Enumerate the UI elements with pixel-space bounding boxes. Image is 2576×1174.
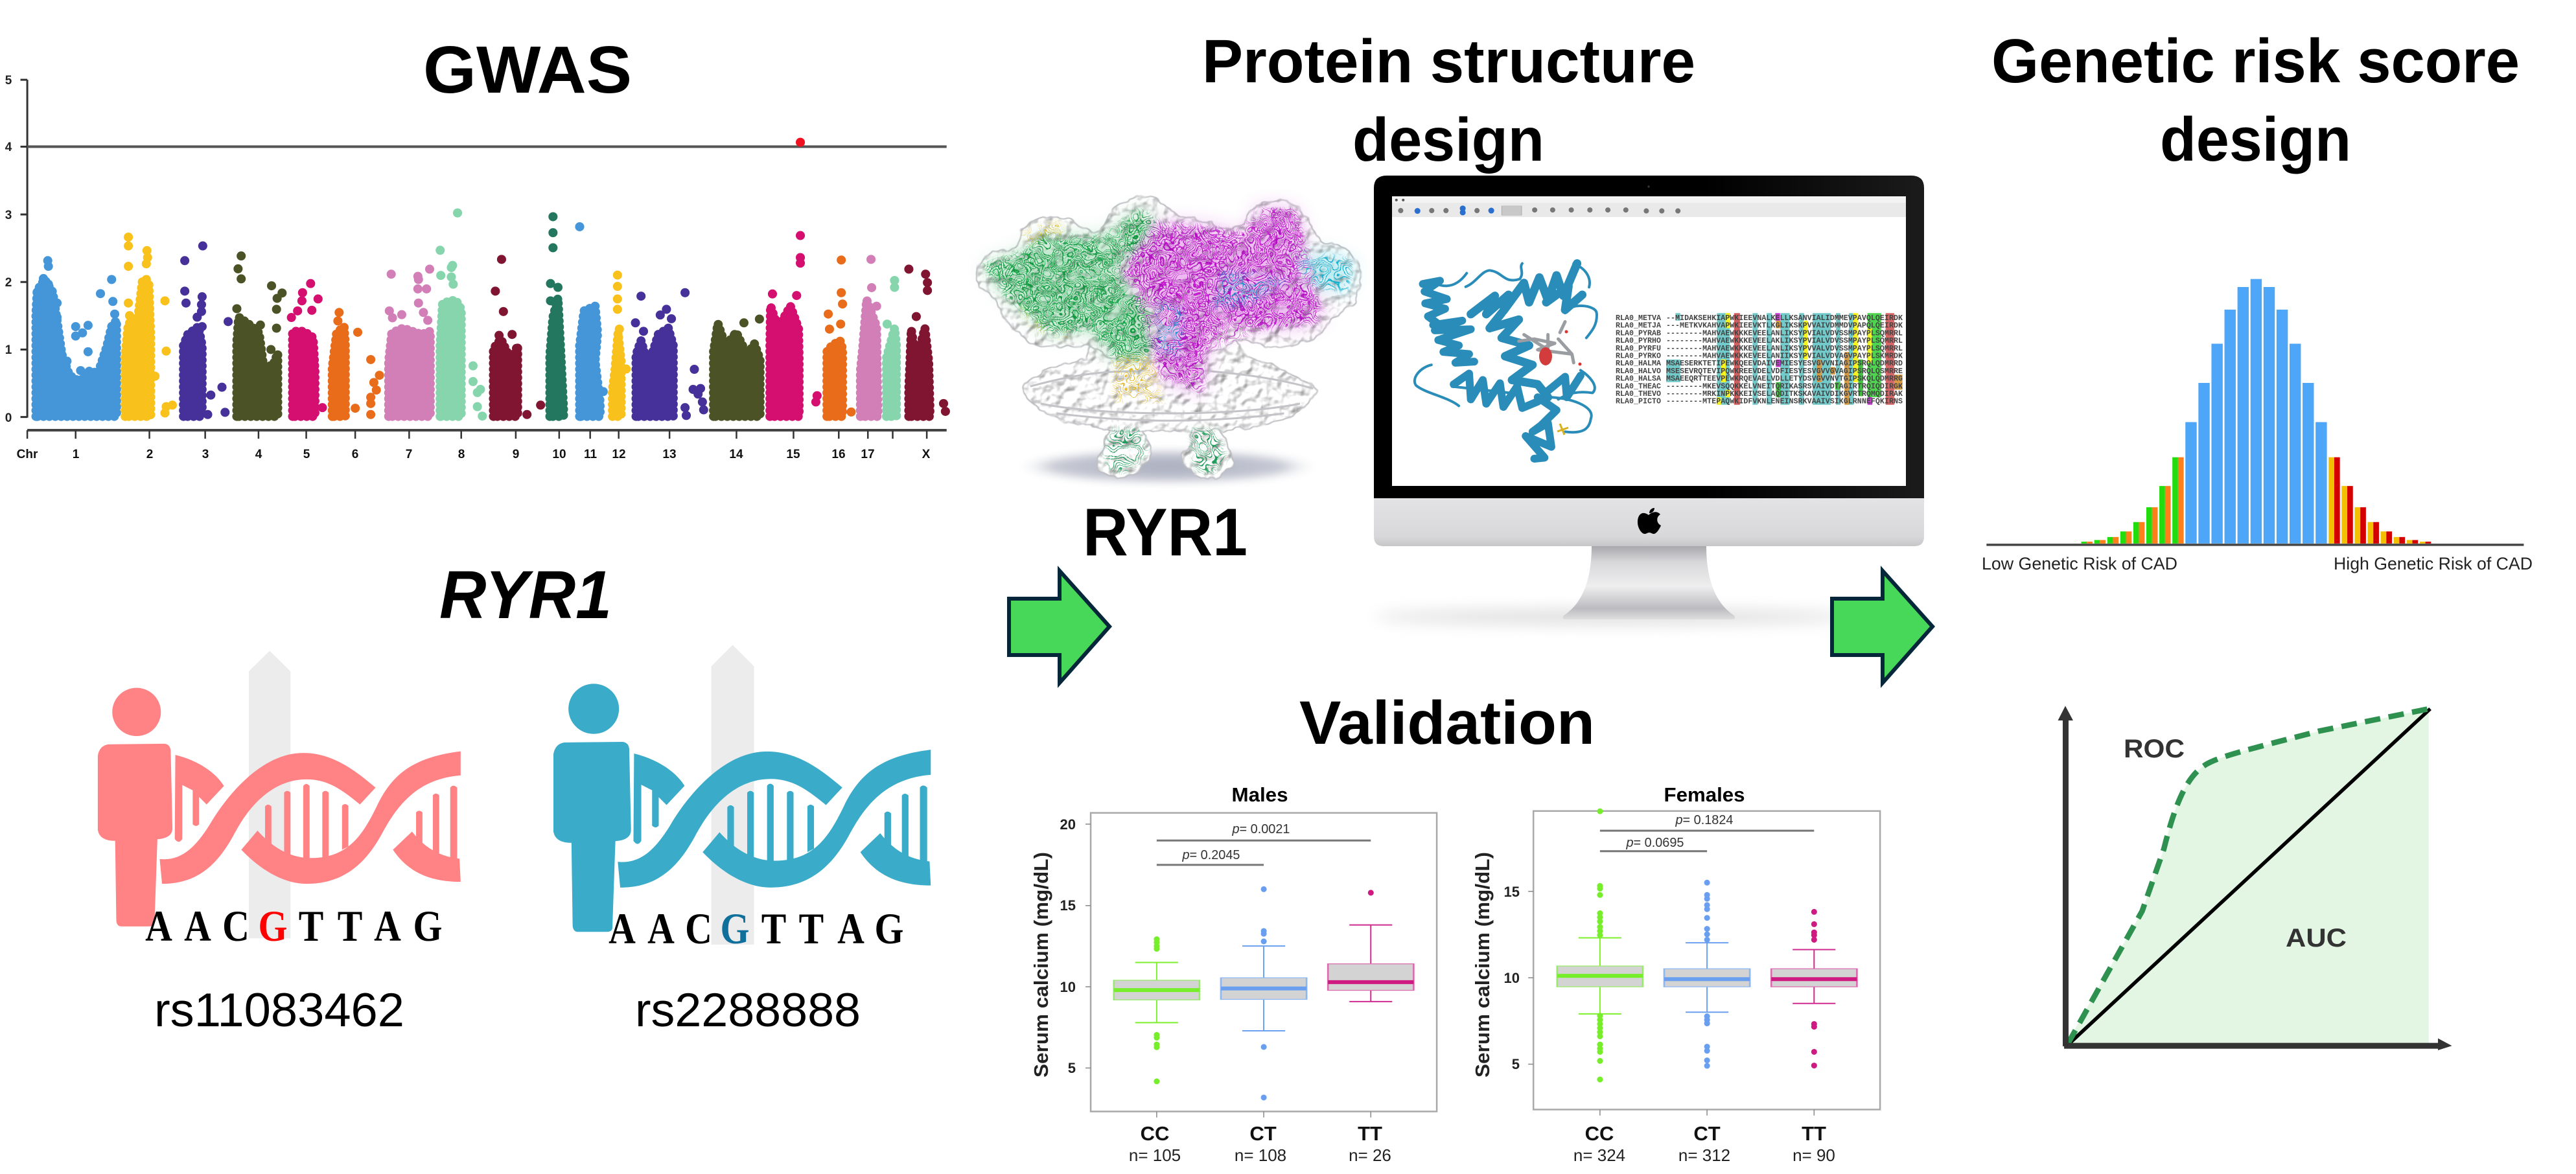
CC box: [1114, 939, 1200, 1081]
base sequence: A: [647, 904, 675, 953]
y tick labels: 15: [1504, 884, 1520, 900]
genotype labels: TT: [1358, 1122, 1382, 1145]
genotype labels: CT: [1693, 1122, 1721, 1145]
p values: p= 0.2045: [1182, 848, 1240, 862]
alignment rows: --------MRKINPKKKEIVSELAQDITKSKAVAIVDIKGVRTRQMQDIRAK: [1666, 389, 1903, 398]
ROC curve chart: [2058, 706, 2452, 1050]
computer monitor: [1374, 176, 1924, 624]
genotype labels: [1573, 1122, 1835, 1165]
low-risk green tails: [2082, 457, 2178, 544]
y tick labels: 10: [1060, 979, 1076, 995]
alignment rows: RLA0_PYRFU: [1616, 344, 1661, 353]
high-risk yellow tails: [2328, 457, 2426, 544]
alignment rows: MSESEVRQTEVIPQWKREEVDELVDFIESYESVGVVGVAGIPSRQLQSMRRE: [1666, 367, 1903, 376]
genotype labels: n= 90: [1793, 1145, 1835, 1165]
manhattan chromosome labels: 2: [146, 448, 153, 461]
arrow: centre to right: [1832, 571, 1932, 683]
manhattan y axis labels: 4: [5, 141, 12, 154]
manhattan y axis labels: 0: [5, 411, 12, 425]
ligand atoms: [1564, 330, 1581, 365]
protein chains: [982, 207, 1353, 475]
alignment rows: [1616, 314, 1903, 406]
axis arrowheads: [2058, 706, 2452, 1050]
genotype labels: CC: [1141, 1122, 1169, 1145]
alignment rows: --------MAHVAEWKKKEVEELAKLIKSYPVIALVDVSSMPAYPLSQMRRL: [1666, 336, 1903, 345]
genotype labels: [1129, 1122, 1391, 1165]
manhattan chromosome labels: Chr: [17, 448, 38, 461]
y axis title: Serum calcium (mg/dL): [1471, 852, 1494, 1077]
high-risk red tails: [2334, 457, 2431, 544]
title: GWAS: GWAS: [423, 32, 632, 107]
base sequence: A: [837, 904, 864, 953]
title: genetic risk score design: Genetic risk score: [1991, 27, 2520, 96]
base sequence: A: [145, 902, 172, 950]
y axis title: Serum calcium (mg/dL): [1030, 852, 1052, 1077]
alignment rows: ---METKVKAHVAPWKIEEVKTLKGLIKSKPVVAIVDMMDVPAPQLQEIRDK: [1666, 321, 1903, 330]
alignment rows: RLA0_HALMA: [1616, 359, 1662, 368]
boxes and whiskers: [1528, 811, 1880, 1116]
area under curve: [2066, 709, 2429, 1044]
app toolbar: [1392, 196, 1906, 217]
manhattan y axis labels: 1: [5, 343, 12, 357]
diagonal: [2066, 709, 2430, 1046]
panel title: Females: [1664, 783, 1745, 806]
gray marker arrow: [249, 651, 290, 938]
heme ligand: [1519, 322, 1573, 363]
sequence alignment: [1616, 313, 1903, 406]
channel disc surface: [1015, 339, 1323, 432]
disc seams: [1030, 371, 1313, 420]
SNP id: rs11083462: [154, 984, 404, 1037]
manhattan chromosome labels: 12: [612, 448, 626, 461]
alignment rows: RLA0_THEAC: [1616, 382, 1661, 391]
alignment rows: --------MAHVAEWKKKEVEELANLIKSYPVIALVDVSSMPAYPLSQMRRL: [1666, 328, 1903, 338]
y tick labels: [1504, 884, 1520, 1072]
axes: [2064, 717, 2441, 1046]
base sequence: T: [338, 902, 362, 950]
conservation highlights: [1666, 313, 1903, 405]
SNP figure: rs11083462: [98, 651, 461, 1037]
SNP figure: rs2288888: [553, 645, 931, 1037]
manhattan chromosome labels: 14: [729, 448, 743, 461]
manhattan y axis labels: [5, 74, 12, 425]
manhattan chromosome labels: 16: [831, 448, 846, 461]
AUC label: AUC: [2286, 924, 2347, 952]
base sequence: G: [413, 902, 443, 950]
manhattan axes and threshold line: [21, 80, 947, 439]
toolbar buttons: [1397, 200, 1678, 215]
title: genetic risk score design: [1991, 27, 2520, 174]
title: RYR1 gene: RYR1: [439, 557, 612, 633]
manhattan chromosome labels: 1: [73, 448, 80, 461]
alignment rows: RLA0_HALVO: [1616, 367, 1661, 376]
base sequence: C: [222, 902, 249, 950]
manhattan chromosome labels: 9: [513, 448, 519, 461]
alignment rows: RLA0_METVA: [1616, 314, 1662, 323]
base sequence: G: [721, 904, 749, 953]
alignment rows: --MIDAKSEHKIAPWKIEEVNALKELLKSANVIALIDMMEVPAVQLQEIRDK: [1666, 314, 1903, 323]
genotype labels: CT: [1249, 1122, 1277, 1145]
manhattan chromosome labels: 7: [406, 448, 412, 461]
alignment rows: RLA0_PYRKO: [1616, 351, 1661, 360]
boxplot: Males: [1030, 783, 1437, 1165]
TT box: [1328, 893, 1413, 1002]
manhattan y axis labels: 2: [5, 276, 12, 290]
alignment rows: --------MAHVAEWKKKEVEELANIIKSYPVIALVDVAGVPAYPLSKMRDK: [1666, 351, 1903, 360]
alignment rows: RLA0_PYRAB: [1616, 328, 1661, 338]
alignment rows: MSAEEQRTTEEVPEWKRQEVAELVDLLETYDSVGVVNVTGIPSKQLQDMRRG: [1666, 374, 1903, 384]
central blue bars: [2185, 279, 2327, 544]
protein ribbon model: [1415, 264, 1597, 459]
manhattan plot: [5, 74, 947, 461]
RYR1 protein structure: [973, 194, 1362, 485]
color tint layer: [982, 207, 1353, 393]
screen: [1392, 196, 1906, 486]
genotype labels: TT: [1802, 1122, 1826, 1145]
p values: p= 0.0021: [1232, 822, 1290, 836]
genotype labels: n= 108: [1235, 1145, 1286, 1165]
y tick labels: 15: [1060, 897, 1076, 914]
label: RYR1: RYR1: [1083, 495, 1247, 570]
manhattan y axis labels: 5: [5, 74, 12, 87]
alignment rows: RLA0_PYRHO: [1616, 336, 1661, 345]
manhattan chromosome labels: X: [922, 448, 931, 461]
monitor shadow: [1374, 610, 1853, 624]
significant SNP: [796, 138, 805, 147]
histogram baseline: [1986, 544, 2524, 546]
manhattan data points: [36, 143, 946, 417]
alignment rows: RLA0_PICTO: [1616, 397, 1661, 406]
ROC curve dashed: [2068, 709, 2429, 1044]
y tick labels: 5: [1068, 1060, 1076, 1076]
title: protein structure design: [1202, 27, 1695, 174]
genotype labels: n= 26: [1349, 1145, 1391, 1165]
alignment rows: --------MTEPAQWKIDFVKNLENEINSRKVAAIVSIKGLRNNEFQKIRNS: [1666, 397, 1903, 406]
feet surface: [1093, 425, 1238, 479]
camera dot: [1647, 185, 1650, 188]
genotype labels: CC: [1585, 1122, 1614, 1145]
low risk label: Low Genetic Risk of CAD: [1982, 554, 2177, 573]
manhattan chromosome labels: 10: [552, 448, 566, 461]
manhattan chromosome labels: 5: [303, 448, 310, 461]
genotype labels: n= 324: [1573, 1145, 1625, 1165]
manhattan chromosome labels: 3: [202, 448, 209, 461]
title: protein structure design: design: [1352, 106, 1544, 174]
arrow: left to centre: [1009, 571, 1109, 683]
genotype labels: n= 105: [1129, 1145, 1181, 1165]
chart geometry: [2058, 706, 2452, 1050]
y tick labels: 10: [1504, 970, 1520, 986]
base sequence: T: [299, 902, 323, 950]
TT box: [1771, 912, 1857, 1066]
histogram bars: [1986, 279, 2524, 545]
monitor stand: [1563, 546, 1735, 619]
heme iron: [1539, 347, 1552, 365]
manhattan chromosome labels: 6: [352, 448, 358, 461]
secondary protein chains: [982, 207, 1321, 404]
high risk label: High Genetic Risk of CAD: [2334, 554, 2533, 573]
low-risk orange tails: [2087, 457, 2184, 544]
alignment rows: --------MKEVSQQKKELVNEITQRIKASRSVAIVDTAGIRTRQIQDIRGK: [1666, 382, 1903, 391]
alignment rows: --------MAHVAEWKKKEVEELANLIKSYPVVALVDVSSMPAYPLSQMRRL: [1666, 344, 1903, 353]
manhattan y axis labels: 3: [5, 209, 12, 222]
title: Validation: Validation: [1299, 689, 1595, 757]
p values: p= 0.1824: [1675, 813, 1733, 827]
ground shadow: [1014, 448, 1322, 485]
base sequence: A: [184, 902, 211, 950]
SNP id: rs2288888: [635, 984, 861, 1037]
base sequence: T: [761, 904, 786, 953]
apple logo icon: [1638, 508, 1661, 534]
base sequence: G: [259, 902, 287, 950]
panel title: Males: [1231, 783, 1288, 806]
manhattan chromosome labels: 17: [861, 448, 875, 461]
alignment rows: RLA0_THEVO: [1616, 389, 1661, 398]
sulfate group: [1557, 424, 1568, 435]
person and DNA helix, blue: [553, 684, 931, 932]
CT box: [1664, 882, 1750, 1066]
monitor bezel: [1374, 176, 1924, 498]
y tick labels: 5: [1512, 1056, 1520, 1072]
manhattan chromosome labels: 11: [584, 448, 597, 461]
manhattan chromosome labels: 15: [786, 448, 800, 461]
genotype labels: n= 312: [1678, 1145, 1730, 1165]
person and DNA helix, pink: [98, 688, 461, 927]
CC box: [1557, 811, 1643, 1079]
base sequence: A: [374, 902, 401, 950]
cytoplasmic surface: [973, 194, 1362, 363]
p values: [1182, 822, 1290, 862]
base sequence: C: [685, 904, 712, 953]
CT box: [1221, 889, 1306, 1098]
boxplot: Females: [1471, 783, 1880, 1165]
manhattan chromosome labels: 4: [255, 448, 262, 461]
base sequence: A: [609, 904, 636, 953]
y tick labels: 20: [1060, 816, 1076, 833]
alignment rows: MSAESERKTETIPEWKQEEVDAIVEMIESYESVGVVNIAGIPSRQLQDMRRD: [1666, 359, 1903, 368]
ribbon helices: [1423, 281, 1474, 363]
ribbon loops: [1415, 264, 1597, 432]
base sequence: T: [799, 904, 824, 953]
manhattan chromosome labels: 13: [662, 448, 677, 461]
manhattan chromosome labels: 8: [458, 448, 465, 461]
base sequence: G: [875, 904, 903, 953]
p values: p= 0.0695: [1626, 836, 1684, 850]
monitor chin: [1374, 498, 1924, 546]
ROC label: ROC: [2124, 735, 2185, 763]
manhattan chromosome labels: [17, 448, 931, 461]
title: genetic risk score design: design: [2160, 105, 2351, 174]
alignment rows: RLA0_METJA: [1616, 321, 1662, 330]
alignment rows: RLA0_HALSA: [1616, 374, 1662, 384]
genetic risk histogram: [1982, 279, 2533, 573]
boxes and whiskers: [1085, 813, 1437, 1118]
gray marker arrow: [711, 645, 754, 945]
title: protein structure design: Protein structure: [1202, 27, 1695, 96]
y tick labels: [1060, 816, 1076, 1076]
p values: [1626, 813, 1733, 850]
